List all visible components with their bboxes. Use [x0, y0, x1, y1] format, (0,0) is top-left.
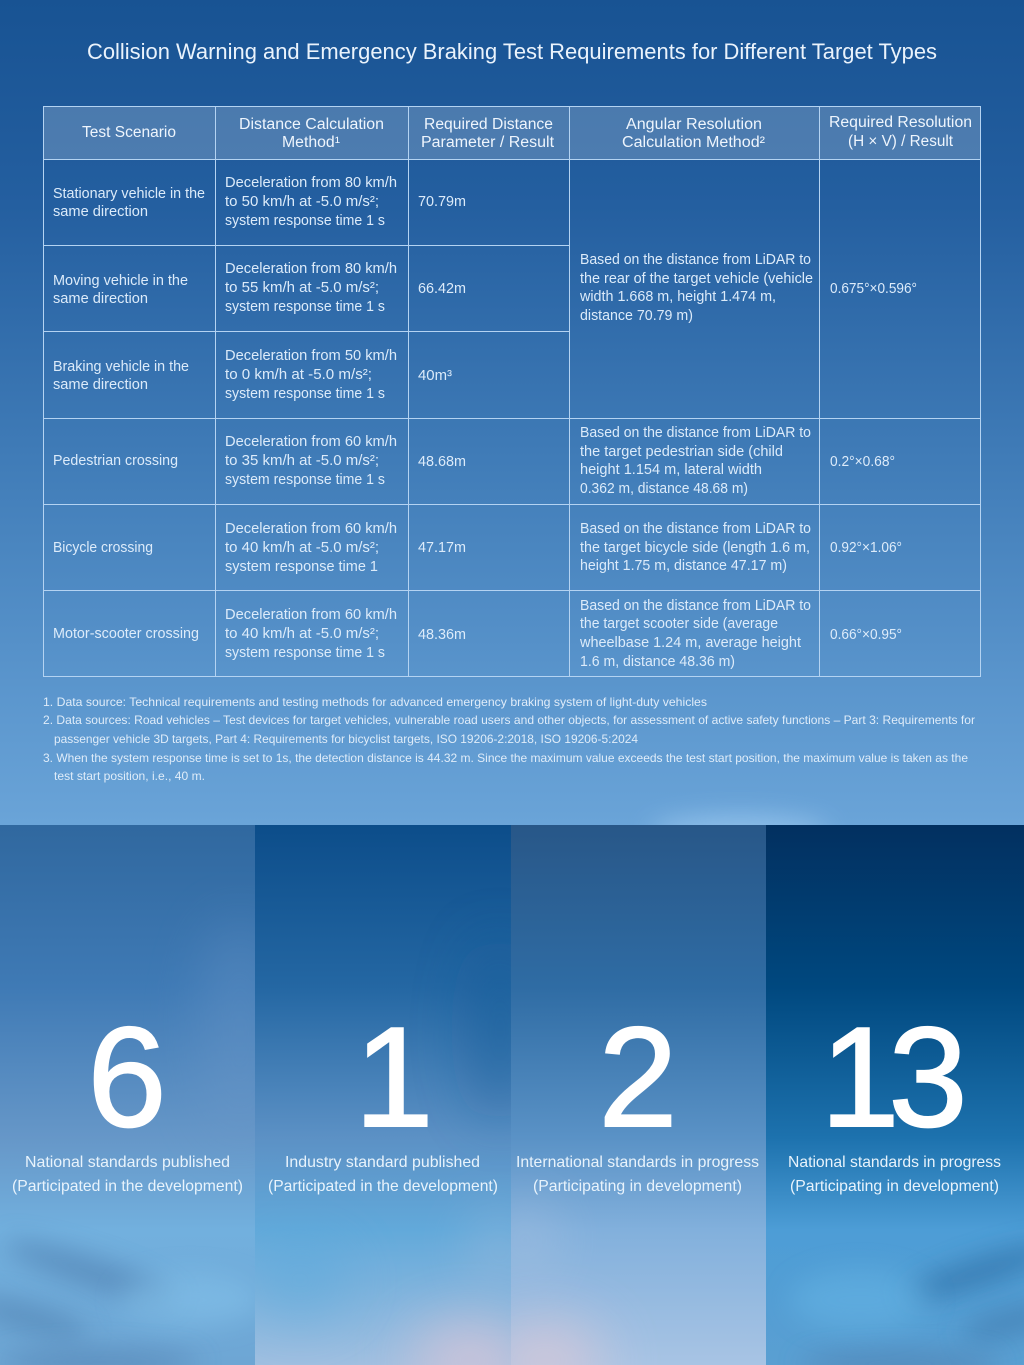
row: motor-scooter crossing: system response time 1 s — [225, 645, 385, 661]
row: bicycle crossing: 0.92°×1.06° — [830, 540, 902, 556]
stat: 2: 2 — [599, 998, 677, 1157]
row: stationary vehicle: same direction — [53, 204, 148, 220]
row: pedestrian crossing — [53, 425, 895, 497]
row: braking vehicle: Deceleration from 50 km/h — [225, 348, 397, 364]
row: motor-scooter crossing — [53, 598, 902, 670]
label: national standards published: National standards published — [25, 1154, 230, 1171]
footnotes: 1. Data source: Technical requirements and testing methods for advanced emergency braking system of light-duty vehicles — [43, 695, 707, 709]
row: stationary vehicle: Stationary vehicle in the — [53, 186, 205, 202]
row: stationary vehicle: to 50 km/h at -5.0 m/s²; — [225, 194, 379, 210]
row: braking vehicle: to 0 km/h at -5.0 m/s²; — [225, 367, 372, 383]
label: international standards in progress: (Participating in development) — [533, 1178, 742, 1195]
table header row: Calculation Method² — [622, 134, 765, 151]
row: moving vehicle — [53, 261, 466, 315]
merged cell: vehicle angular resolution: Based on the distance from LiDAR to — [580, 252, 811, 268]
row: stationary vehicle: 70.79m — [418, 194, 466, 210]
row: bicycle crossing: to 40 km/h at -5.0 m/s²; — [225, 540, 379, 556]
merged cell: vehicle angular resolution — [579, 252, 917, 324]
label: international standards in progress — [516, 1154, 759, 1195]
row: stationary vehicle: system response time 1 s — [225, 213, 385, 229]
row: braking vehicle: Braking vehicle in the — [53, 359, 189, 375]
row: braking vehicle: system response time 1 s — [225, 386, 385, 402]
stat: 13: 3 — [889, 998, 967, 1157]
row: pedestrian crossing: Pedestrian crossing — [53, 453, 178, 469]
row: braking vehicle: 40m³ — [418, 368, 452, 384]
row: bicycle crossing — [53, 521, 902, 575]
label: national standards in progress: National standards in progress — [788, 1154, 1001, 1171]
row: moving vehicle: 66.42m — [418, 281, 466, 297]
table: test requirements — [43, 106, 981, 677]
label: national standards in progress: (Participating in development) — [790, 1178, 999, 1195]
row: moving vehicle: Moving vehicle in the — [53, 273, 188, 289]
row: pedestrian crossing: 0.362 m, distance 48.68 m) — [580, 481, 748, 497]
row: pedestrian crossing: Deceleration from 60 km/h — [225, 434, 397, 450]
label: industry standard published — [268, 1154, 498, 1195]
merged cell: vehicle angular resolution: 0.675°×0.596° — [830, 281, 917, 297]
row: motor-scooter crossing: 1.6 m, distance 48.36 m) — [580, 654, 735, 670]
stat: 13: 1 — [821, 998, 899, 1157]
merged cell: vehicle angular resolution: the rear of the target vehicle (vehicle — [580, 271, 813, 287]
stat: 6: 6 — [88, 998, 166, 1157]
table header row: (H × V) / Result — [848, 133, 954, 150]
row: motor-scooter crossing: Deceleration from 60 km/h — [225, 607, 397, 623]
table header background — [43, 106, 981, 159]
table header row: Required Resolution — [829, 114, 972, 131]
row: motor-scooter crossing: Based on the distance from LiDAR to — [580, 598, 811, 614]
label: national standards published: (Participated in the development) — [12, 1178, 243, 1195]
label: industry standard published: Industry standard published — [285, 1154, 480, 1171]
row: motor-scooter crossing: 48.36m — [418, 627, 466, 643]
table header row: Required Distance — [424, 116, 553, 133]
row: moving vehicle: same direction — [53, 291, 148, 307]
title: Collision Warning and Emergency Braking Test Requirements for Different Target Types — [87, 39, 937, 64]
panel: national standards published — [0, 825, 280, 1365]
row: stationary vehicle: Deceleration from 80 km/h — [225, 175, 397, 191]
row: moving vehicle: Deceleration from 80 km/h — [225, 261, 397, 277]
row: bicycle crossing: the target bicycle side (length 1.6 m, — [580, 540, 810, 556]
background: upper sky gradient — [0, 191, 1024, 825]
footnotes — [43, 695, 975, 783]
row: pedestrian crossing: 48.68m — [418, 454, 466, 470]
table header row: Method¹ — [282, 134, 340, 151]
row: stationary vehicle — [53, 175, 466, 229]
footnotes: 3. When the system response time is set to 1s, the detection distance is 44.32 m. Since the maximum value exceeds the test start position, the maximum value is taken as the — [43, 751, 968, 765]
row: motor-scooter crossing: 0.66°×0.95° — [830, 627, 902, 643]
row: bicycle crossing: Based on the distance from LiDAR to — [580, 521, 811, 537]
row: motor-scooter crossing: wheelbase 1.24 m, average height — [579, 635, 801, 651]
panel: international standards in progress — [485, 825, 766, 1365]
row: bicycle crossing: 47.17m — [418, 540, 466, 556]
table header row — [82, 114, 972, 151]
label: industry standard published: (Participated in the development) — [268, 1178, 498, 1195]
row: pedestrian crossing: system response time 1 s — [225, 472, 385, 488]
row: braking vehicle — [53, 348, 452, 402]
row: motor-scooter crossing: the target scooter side (average — [580, 616, 778, 632]
table header row: Parameter / Result — [421, 134, 555, 151]
table header row: Angular Resolution — [626, 116, 762, 133]
row: bicycle crossing: height 1.75 m, distance 47.17 m) — [580, 558, 787, 574]
row: bicycle crossing: Deceleration from 60 km/h — [225, 521, 397, 537]
row: motor-scooter crossing: to 40 km/h at -5.0 m/s²; — [225, 626, 379, 642]
row: pedestrian crossing: height 1.154 m, lateral width — [580, 462, 762, 478]
row: bicycle crossing: system response time 1 — [225, 559, 378, 575]
row: moving vehicle: system response time 1 s — [225, 299, 385, 315]
row: braking vehicle: same direction — [53, 377, 148, 393]
stat: 13 — [821, 998, 967, 1157]
table header row: Distance Calculation — [239, 116, 384, 133]
row: moving vehicle: to 55 km/h at -5.0 m/s²; — [225, 280, 379, 296]
table header row: Test Scenario — [82, 124, 176, 141]
merged cell: vehicle angular resolution: width 1.668 m, height 1.474 m, — [579, 289, 776, 305]
merged cell: vehicle angular resolution: distance 70.79 m) — [580, 308, 693, 324]
table grid — [43, 106, 981, 677]
footnotes: test start position, i.e., 40 m. — [54, 769, 205, 783]
footnotes: passenger vehicle 3D targets, Part 4: Requirements for bicyclist targets, ISO 19206-2:2018, ISO 19206-5:2024 — [54, 732, 638, 746]
label: national standards in progress — [788, 1154, 1001, 1195]
row: pedestrian crossing: to 35 km/h at -5.0 m/s²; — [225, 453, 379, 469]
label: national standards published — [12, 1154, 243, 1195]
stat: 1: 1 — [355, 998, 433, 1157]
row: pedestrian crossing: 0.2°×0.68° — [830, 454, 895, 470]
row: bicycle crossing: Bicycle crossing — [53, 540, 153, 556]
label: international standards in progress: International standards in progress — [516, 1154, 759, 1171]
panel: national standards in progress — [766, 825, 1024, 1365]
row: pedestrian crossing: the target pedestrian side (child — [580, 444, 783, 460]
row: pedestrian crossing: Based on the distance from LiDAR to — [580, 425, 811, 441]
panel: industry standard published — [250, 825, 530, 1365]
footnotes: 2. Data sources: Road vehicles – Test devices for target vehicles, vulnerable road users and other objects, for assessment of active safety functions – Part 3: Requirements for — [43, 713, 975, 727]
row: motor-scooter crossing: Motor-scooter crossing — [53, 626, 199, 642]
